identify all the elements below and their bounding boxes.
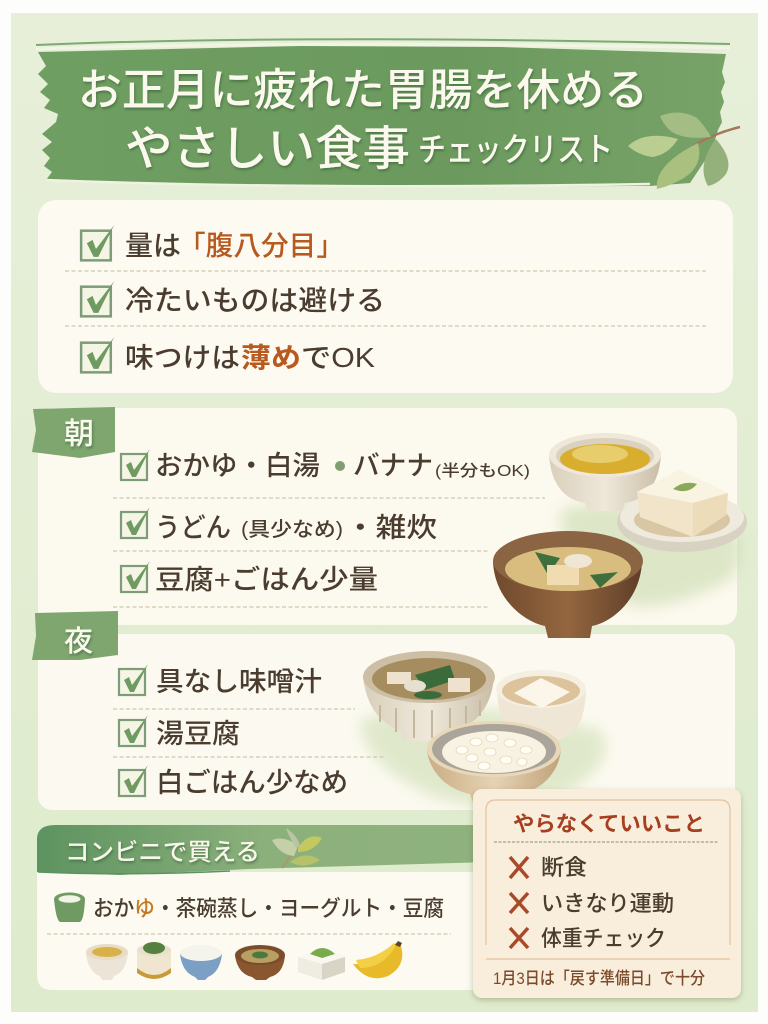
panel: morning <box>32 407 741 625</box>
callout: things you need not do <box>473 789 741 998</box>
item: udon: うどん <box>155 513 231 543</box>
watercolor wash <box>560 500 741 607</box>
callout item: fasting: 断食 <box>541 855 587 880</box>
label: morning: 朝 <box>64 418 94 451</box>
rule 3: でOK <box>301 342 376 373</box>
item: okayu: (半分もOK) <box>435 462 530 480</box>
title banner <box>36 39 730 187</box>
convenience items: おかゆ・茶碗蒸し・ヨーグルト・豆腐 <box>93 896 444 921</box>
title line 2: やさしい食事 <box>125 122 410 175</box>
callout heading: やらなくていいこと <box>513 813 705 836</box>
rule 1: 量は <box>125 230 181 261</box>
item: udon: ・雑炊 <box>345 513 437 543</box>
icon: mini chawanmushi <box>137 942 171 979</box>
item: yudofu: 湯豆腐 <box>156 719 240 749</box>
item: tofu rice: 豆腐+ごはん少量 <box>155 565 378 595</box>
illustration: miso soup bowl <box>363 651 495 741</box>
icon: mini miso bowl <box>235 945 285 980</box>
panel: basic rules <box>38 200 733 393</box>
convenience header <box>37 825 490 875</box>
label: morning <box>32 407 115 458</box>
title suffix: チェックリスト <box>418 131 613 168</box>
icon: leaves <box>628 112 740 189</box>
mini food icons <box>86 941 402 980</box>
icon: mini tofu <box>298 948 345 980</box>
illustration: okayu bowl <box>549 433 661 511</box>
illustration: brown soup bowl <box>493 531 643 638</box>
callout item: sudden exercise: いきなり運動 <box>541 891 674 916</box>
callout item: fasting <box>510 855 587 880</box>
item: okayu: おかゆ・白湯 <box>155 451 320 481</box>
item: rice: 白ごはん少なめ <box>156 768 348 798</box>
icon: mini blue bowl <box>180 945 222 980</box>
label: night <box>32 611 118 660</box>
watercolor wash <box>360 707 606 805</box>
callout item: weight check: 体重チェック <box>541 926 666 951</box>
convenience header: コンビニで買える <box>65 839 260 866</box>
label: night: 夜 <box>64 626 93 658</box>
callout footer: 1月3日は「戻す準備日」で十分 <box>493 969 705 988</box>
panel: night <box>32 611 735 810</box>
icon: mini bowl <box>86 944 128 980</box>
item: udon: (具少なめ) <box>241 518 343 541</box>
title line 1: お正月に疲れた胃腸を休める <box>78 66 648 115</box>
illustration: rice bowl <box>427 721 561 805</box>
callout inner frame <box>486 800 730 945</box>
illustration: yudofu cup <box>496 670 586 742</box>
rule 1: 「腹八分目」 <box>178 230 344 261</box>
item: miso soup: 具なし味噌汁 <box>156 667 322 697</box>
rule 3: 薄め <box>241 342 301 373</box>
icon: mini banana <box>353 941 402 978</box>
item: udon <box>121 507 437 543</box>
rule 3 <box>81 337 376 373</box>
illustration: tofu on plate <box>617 470 747 552</box>
panel: convenience store <box>37 825 490 990</box>
item: okayu: バナナ <box>353 451 433 481</box>
icon: cup <box>54 892 85 922</box>
rule 3: 味つけは <box>125 342 240 373</box>
item: okayu <box>121 449 530 481</box>
banner brush shape <box>38 46 726 187</box>
icon: sprig <box>272 828 322 868</box>
item: yudofu <box>119 715 240 749</box>
rule 2: 冷たいものは避ける <box>125 285 385 316</box>
rule 1 <box>81 225 344 261</box>
